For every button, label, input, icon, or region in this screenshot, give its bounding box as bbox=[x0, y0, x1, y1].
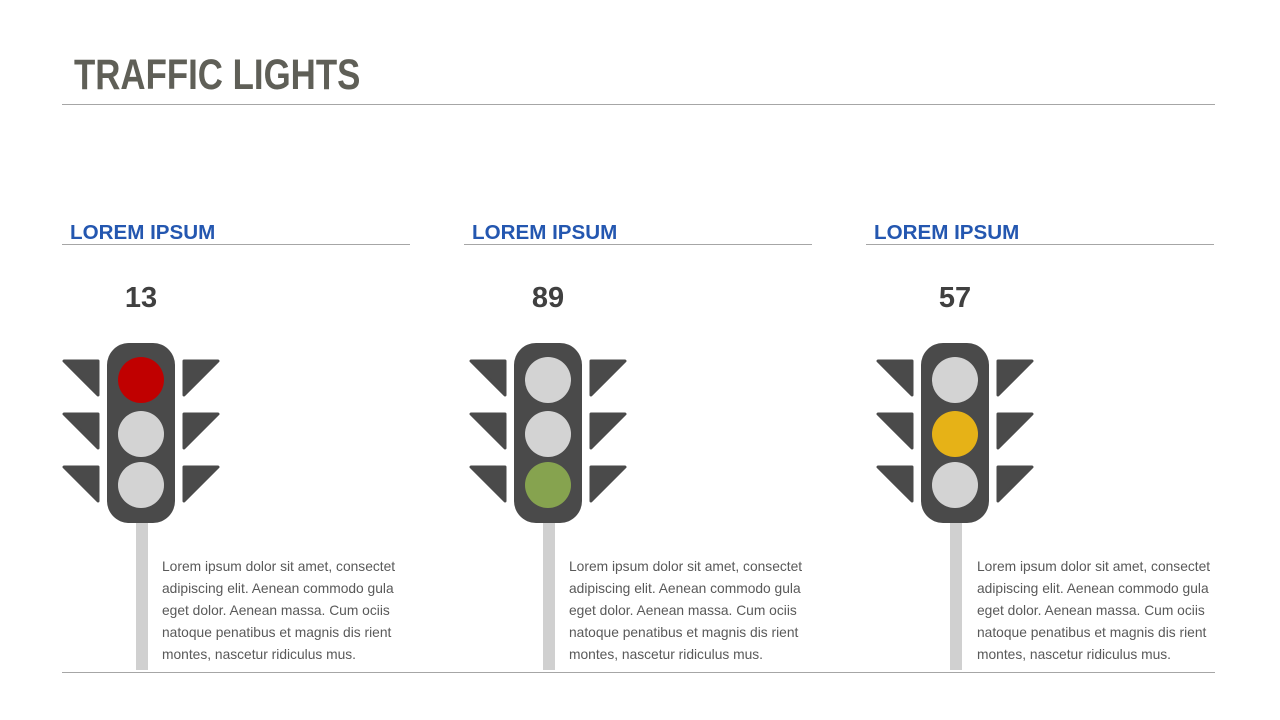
text block: Lorem ipsum dolor sit amet, consectet bbox=[162, 559, 395, 574]
text block: Lorem ipsum dolor sit amet, consectet bbox=[977, 559, 1210, 574]
text block bbox=[977, 559, 1210, 662]
text block: eget dolor. Aenean massa. Cum ociis bbox=[569, 603, 797, 618]
text block: eget dolor. Aenean massa. Cum ociis bbox=[977, 603, 1205, 618]
text block: montes, nascetur ridiculus mus. bbox=[162, 647, 356, 662]
text block: adipiscing elit. Aenean commodo gula bbox=[162, 581, 394, 596]
number: 13 bbox=[125, 282, 157, 314]
text block: montes, nascetur ridiculus mus. bbox=[977, 647, 1171, 662]
number: 89 bbox=[532, 282, 564, 314]
icon: traffic light red bbox=[62, 343, 220, 670]
heading: LOREM IPSUM bbox=[874, 221, 1019, 244]
panel: traffic light 2 bbox=[464, 221, 812, 670]
panel: traffic light 3 bbox=[866, 221, 1214, 670]
panel: traffic light 1 bbox=[62, 221, 410, 670]
text block bbox=[569, 559, 802, 662]
text block: montes, nascetur ridiculus mus. bbox=[569, 647, 763, 662]
heading: LOREM IPSUM bbox=[472, 221, 617, 244]
text block: eget dolor. Aenean massa. Cum ociis bbox=[162, 603, 390, 618]
text block bbox=[162, 559, 395, 662]
text block: adipiscing elit. Aenean commodo gula bbox=[977, 581, 1209, 596]
text block: Lorem ipsum dolor sit amet, consectet bbox=[569, 559, 802, 574]
icon: traffic light green bbox=[469, 343, 627, 670]
heading: LOREM IPSUM bbox=[70, 221, 215, 244]
text block: natoque penatibus et magnis dis rient bbox=[569, 625, 798, 640]
icon: traffic light yellow bbox=[876, 343, 1034, 670]
title: TRAFFIC LIGHTS bbox=[74, 51, 360, 99]
text block: natoque penatibus et magnis dis rient bbox=[162, 625, 391, 640]
text block: adipiscing elit. Aenean commodo gula bbox=[569, 581, 801, 596]
number: 57 bbox=[939, 282, 971, 314]
text block: natoque penatibus et magnis dis rient bbox=[977, 625, 1206, 640]
